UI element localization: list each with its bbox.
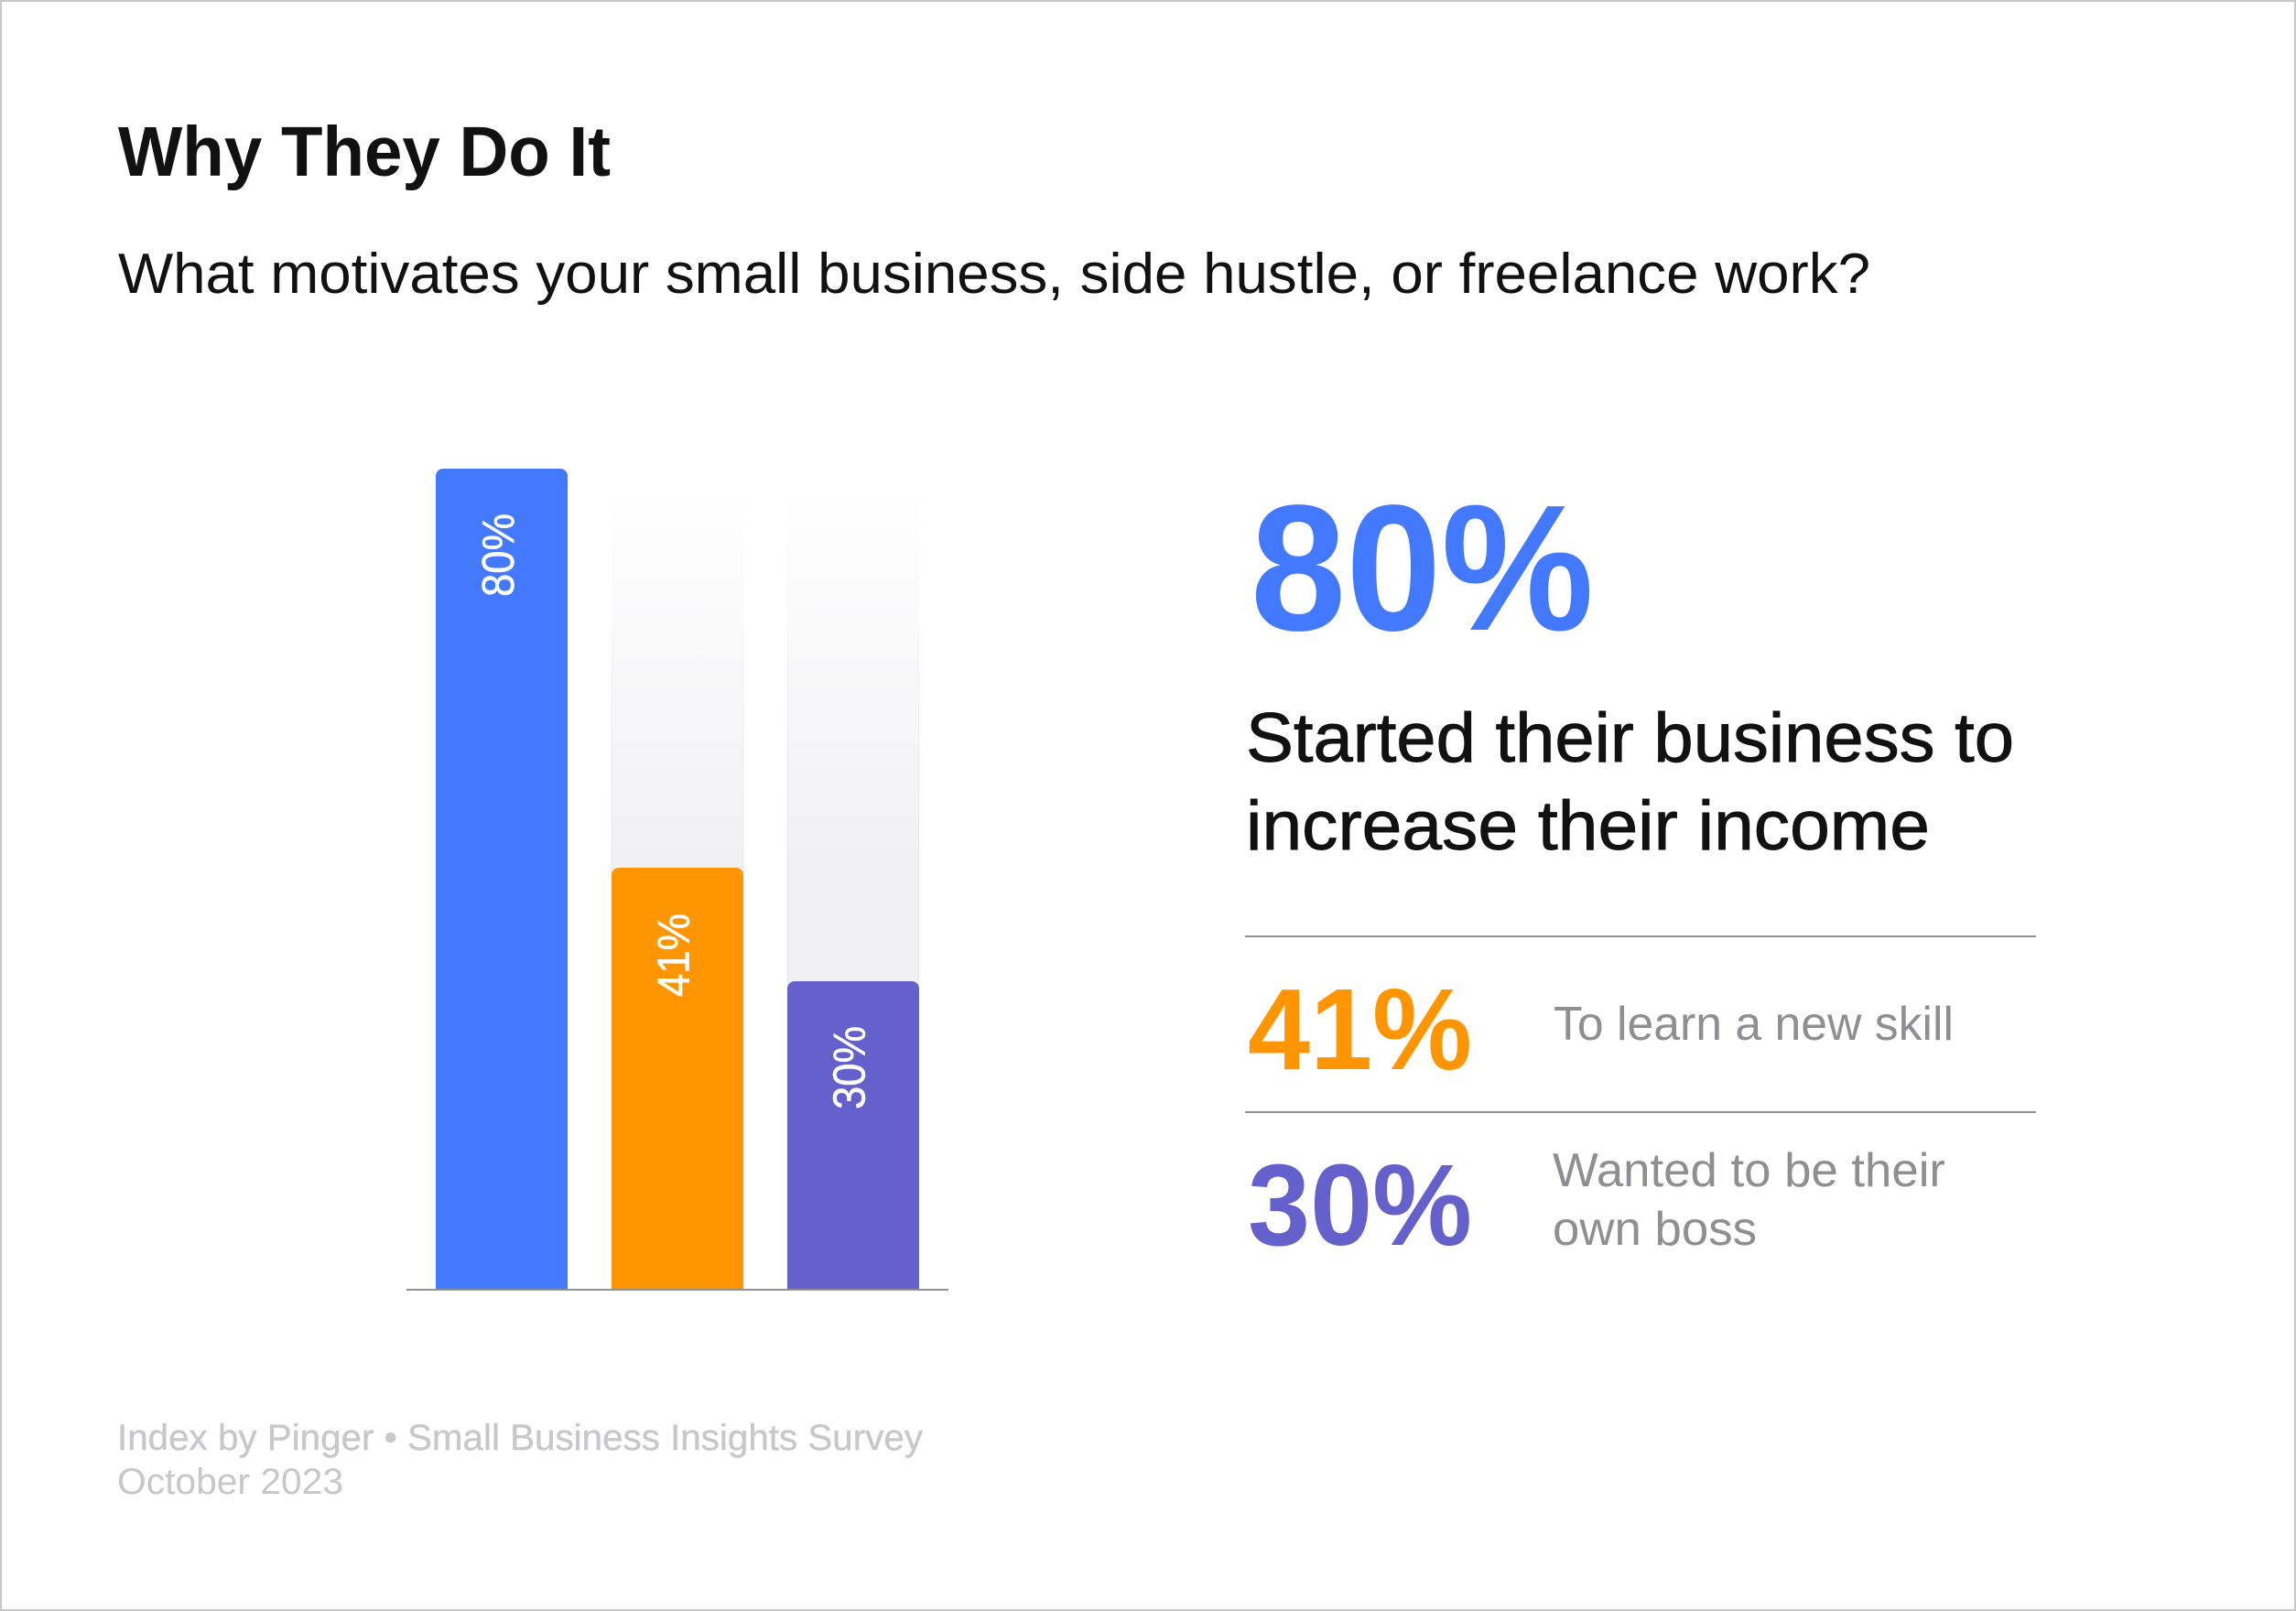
headline description: increase their income xyxy=(1246,787,1930,865)
bar chart xyxy=(406,469,948,1291)
headline stat: 80% xyxy=(1251,468,1594,668)
stat row: 41%: To learn a new skill xyxy=(1554,998,1954,1051)
chart baseline xyxy=(406,1289,948,1291)
divider xyxy=(1245,1111,2036,1113)
subtitle: What motivates your small business, side hustle, or freelance work? xyxy=(118,243,1870,306)
bar: 41%: 41% xyxy=(650,914,699,997)
bar: 80% xyxy=(436,469,568,1289)
stat row: 30%: own boss xyxy=(1553,1203,1757,1256)
track: 30% column xyxy=(787,469,919,994)
source footer xyxy=(117,1418,923,1502)
stat row: 41% xyxy=(1248,965,1954,1094)
bar: 30% xyxy=(787,981,919,1289)
headline description xyxy=(1246,699,2014,865)
divider xyxy=(1245,935,2036,937)
bar: 30%: 30% xyxy=(826,1026,875,1109)
stat row: 30% xyxy=(1248,1141,1945,1270)
source footer: Index by Pinger • Small Business Insights Survey xyxy=(117,1418,923,1458)
bar: 41% xyxy=(612,868,743,1289)
headline description: Started their business to xyxy=(1246,699,2014,777)
track: 41% column xyxy=(612,469,743,881)
bar: 80%: 80% xyxy=(474,514,524,597)
source footer: October 2023 xyxy=(117,1462,343,1502)
title: Why They Do It xyxy=(118,113,611,191)
stat row: 41%: 41% xyxy=(1248,965,1472,1094)
stat row: 30%: Wanted to be their xyxy=(1553,1144,1945,1197)
stat row: 30%: 30% xyxy=(1248,1141,1472,1270)
